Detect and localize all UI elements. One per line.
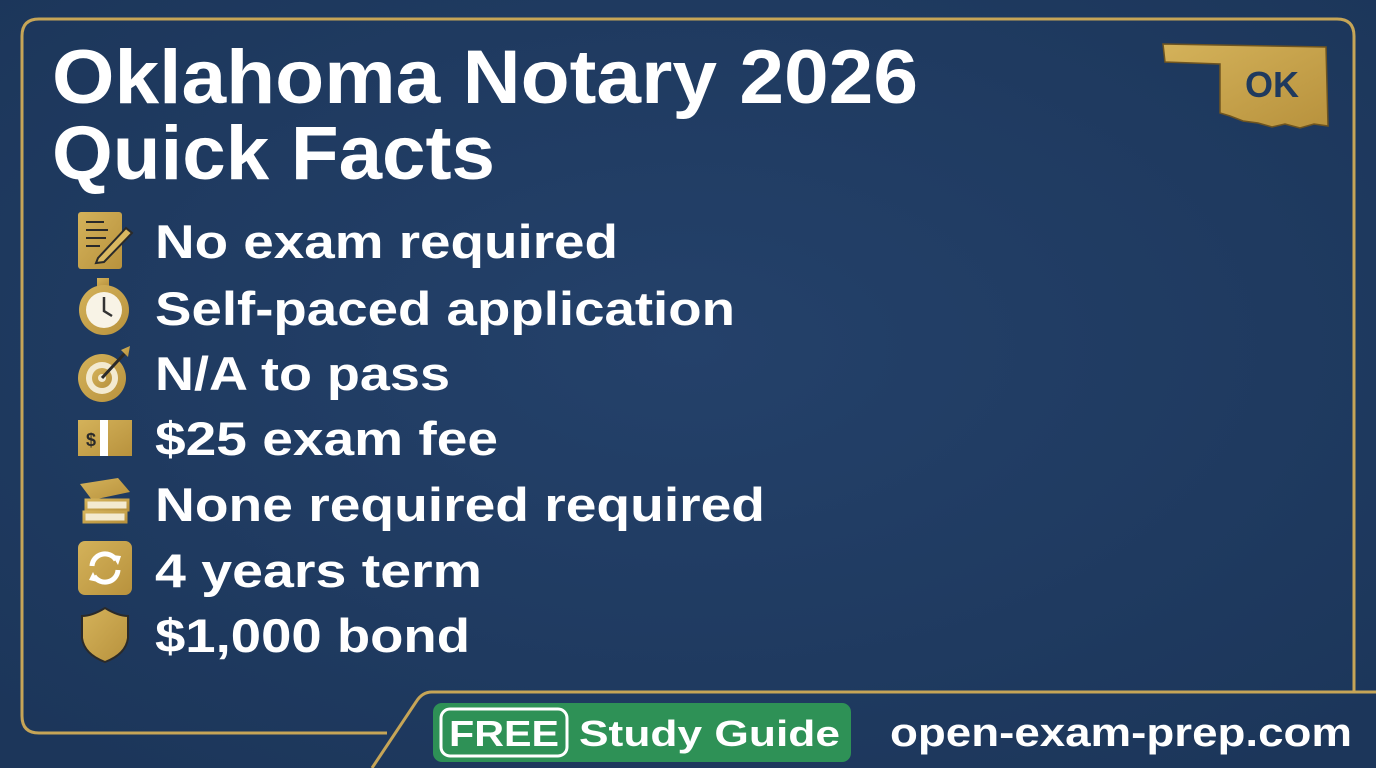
icon: books [80,478,130,522]
url text: open-exam-prep.com [890,711,1352,755]
fact: 4 years term: 4 years term [155,544,482,597]
fact: Self-paced application: Self-paced application [155,282,735,335]
title: Oklahoma Notary 2026 [52,35,918,120]
fact: No exam required: No exam required [155,215,618,268]
button: FREE Study Guide: Study Guide [579,713,840,754]
icon: renew arrows [78,541,132,595]
fact list [78,212,765,662]
icon: stopwatch [79,278,129,335]
icon: document with pencil [78,212,132,269]
fact: N/A to pass: N/A to pass [155,347,450,400]
icon: money bill [78,420,132,456]
fact: None required required: None required required [155,478,765,531]
bottom tab frame [372,692,1376,768]
icon: shield [82,608,128,662]
icon: Oklahoma state map with OK [1163,44,1328,128]
fact: $25 exam fee: $25 exam fee [155,412,498,465]
button: FREE Study Guide: FREE [449,713,559,754]
icon: target with dart [78,346,130,402]
button: FREE Study Guide [433,703,851,762]
icon: Oklahoma state map with OK: OK [1245,64,1299,105]
fact: $1,000 bond: $1,000 bond [155,609,470,662]
title: Quick Facts [52,111,495,196]
icon: money bill: $ [86,430,96,450]
title [52,35,918,196]
